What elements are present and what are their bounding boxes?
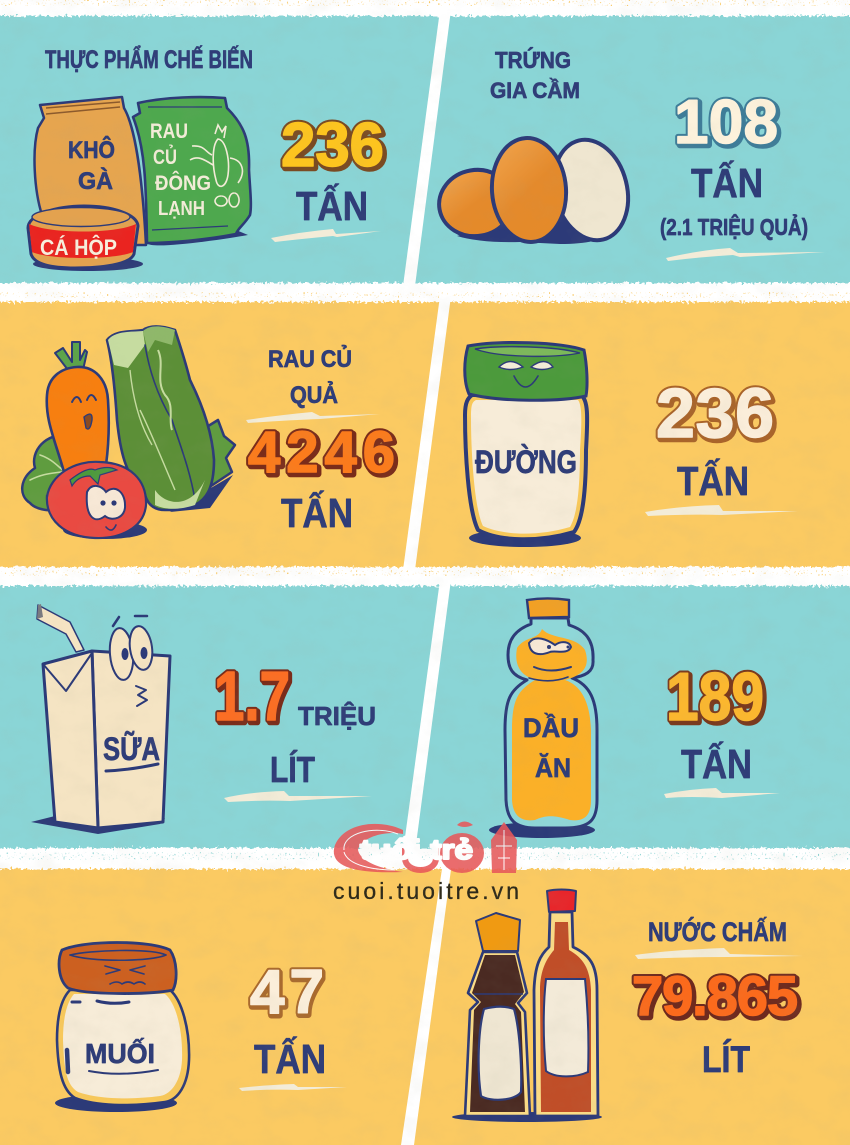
heading: line two: GIA CẦM bbox=[490, 78, 580, 103]
icon: sugar jar bbox=[465, 343, 587, 547]
panel: dipping sauces bbox=[406, 869, 850, 1145]
unit: tons: TẤN bbox=[681, 741, 752, 787]
panel: salt bbox=[0, 869, 448, 1145]
logo: Tuoi Tre Cuoi bbox=[334, 822, 517, 873]
logo: tone mark bbox=[457, 822, 473, 827]
icon: soy sauce bottle bbox=[465, 913, 530, 1116]
swash bbox=[666, 248, 825, 261]
heading: processed foods: THỰC PHẨM CHẾ BIẾN bbox=[45, 45, 253, 74]
speckled gaps between bands bbox=[0, 0, 850, 860]
number: 236 tons: 236 bbox=[283, 113, 386, 182]
number: 4246 tons: 4246 bbox=[248, 420, 395, 485]
number: 189 tons: 189 bbox=[666, 659, 764, 735]
number: 108 tons: 108 bbox=[674, 88, 778, 157]
swash bbox=[239, 1084, 347, 1091]
number: 108 tons: 108 bbox=[674, 88, 778, 157]
unit: tons: TẤN bbox=[296, 183, 368, 229]
logo: white inline details bbox=[344, 830, 512, 870]
heading: line two: QUẢ bbox=[290, 380, 338, 409]
icon: sauce bottles bbox=[452, 890, 602, 1122]
icon: milk carton: SỮA bbox=[103, 731, 160, 767]
icon: salt jar bbox=[55, 942, 189, 1112]
number: 189 tons: 189 bbox=[668, 661, 766, 737]
icon: oil bottle: DẦU bbox=[523, 712, 579, 743]
icon: cabbage bbox=[107, 326, 233, 512]
panel: vegetables bbox=[0, 302, 446, 567]
heading: poultry eggs: TRỨNG bbox=[495, 46, 571, 73]
number: 1.7 million: 1.7 bbox=[214, 657, 290, 735]
number: 79.865 liters: 79.865 bbox=[632, 964, 798, 1027]
number: 236 tons: 236 bbox=[658, 376, 776, 454]
icon: vegetables illustration bbox=[22, 326, 235, 539]
unit: million: TRIỆU bbox=[298, 701, 376, 731]
panel: milk bbox=[0, 586, 446, 848]
number: 47 tons: 47 bbox=[250, 958, 324, 1027]
swash bbox=[224, 791, 372, 802]
logo: wordmark: tuổi trẻ bbox=[360, 834, 473, 865]
website address: cuoi.tuoitre.vn bbox=[333, 878, 519, 904]
icon: salt jar: MUỐI bbox=[85, 1037, 155, 1069]
panel: eggs bbox=[408, 16, 850, 283]
number: 4246 tons: 4246 bbox=[250, 422, 397, 487]
logo: lantern bbox=[491, 822, 517, 873]
icon: milk carton bbox=[31, 604, 170, 834]
icon: lettuce leaves bbox=[22, 420, 235, 511]
heading: dipping sauces: NƯỚC CHẤM bbox=[648, 916, 787, 947]
number: 236 tons: 236 bbox=[656, 374, 774, 452]
number: 1.7 million: 1.7 bbox=[216, 659, 292, 737]
logo: letter U bbox=[405, 846, 436, 870]
number: 79.865 liters: 79.865 bbox=[634, 966, 800, 1029]
icon: canned fish bbox=[28, 206, 143, 271]
icon: frozen vegetables bag bbox=[133, 97, 251, 245]
number: 47 tons: 47 bbox=[251, 960, 325, 1029]
icon: frozen vegetables bag: ĐÔNG bbox=[155, 171, 211, 195]
number: 4246 tons: 4246 bbox=[248, 420, 395, 485]
number: 1.7 million: 1.7 bbox=[214, 657, 290, 735]
number: 236 tons: 236 bbox=[656, 374, 774, 452]
icon: chili sauce bottle bbox=[534, 890, 598, 1116]
slanted white dividers bbox=[401, 10, 452, 1145]
icon: canned fish: CÁ HỘP bbox=[40, 235, 117, 260]
number: 47 tons: 47 bbox=[250, 958, 324, 1027]
swash bbox=[645, 505, 798, 516]
icon: frozen vegetables bag: CỦ bbox=[153, 145, 177, 169]
icon: tomato bbox=[47, 462, 147, 539]
icon: frozen vegetables bag: RAU bbox=[150, 120, 188, 143]
icon: dried chicken bag bbox=[35, 97, 146, 245]
unit: tons: TẤN bbox=[254, 1036, 326, 1082]
icon: oil bottle: ĂN bbox=[535, 752, 571, 783]
note: 2.1 million eggs: (2.1 TRIỆU QUẢ) bbox=[660, 212, 808, 240]
unit: tons: TẤN bbox=[281, 490, 353, 536]
number: 189 tons: 189 bbox=[666, 659, 764, 735]
icon: dried chicken bag: KHÔ bbox=[68, 136, 115, 164]
number: 236 tons: 236 bbox=[281, 111, 384, 180]
icon: carrot bbox=[47, 342, 109, 472]
swash bbox=[271, 229, 381, 242]
unit: tons: TẤN bbox=[691, 160, 763, 206]
unit: liters: LÍT bbox=[702, 1039, 750, 1080]
panel: cooking oil bbox=[408, 586, 850, 848]
number: 236 tons: 236 bbox=[281, 111, 384, 180]
panel: sugar bbox=[408, 302, 850, 567]
logo: letter O bbox=[440, 833, 484, 873]
icon: eggs bbox=[434, 132, 638, 248]
number: 108 tons: 108 bbox=[676, 90, 780, 159]
swash bbox=[635, 948, 803, 959]
number: 79.865 liters: 79.865 bbox=[632, 964, 798, 1027]
unit: liters: LÍT bbox=[270, 749, 315, 790]
icon: sugar jar: ĐƯỜNG bbox=[475, 444, 577, 480]
unit: tons: TẤN bbox=[677, 458, 749, 504]
logo: letter C bbox=[334, 824, 403, 872]
icon: dried chicken bag: GÀ bbox=[78, 167, 113, 195]
icon: frozen vegetables bag: LẠNH bbox=[158, 198, 205, 220]
panel: processed foods bbox=[0, 16, 446, 283]
swash bbox=[246, 412, 380, 423]
heading: vegetables: RAU CỦ bbox=[268, 344, 352, 373]
swash bbox=[664, 788, 780, 798]
icon: oil bottle bbox=[489, 598, 597, 838]
